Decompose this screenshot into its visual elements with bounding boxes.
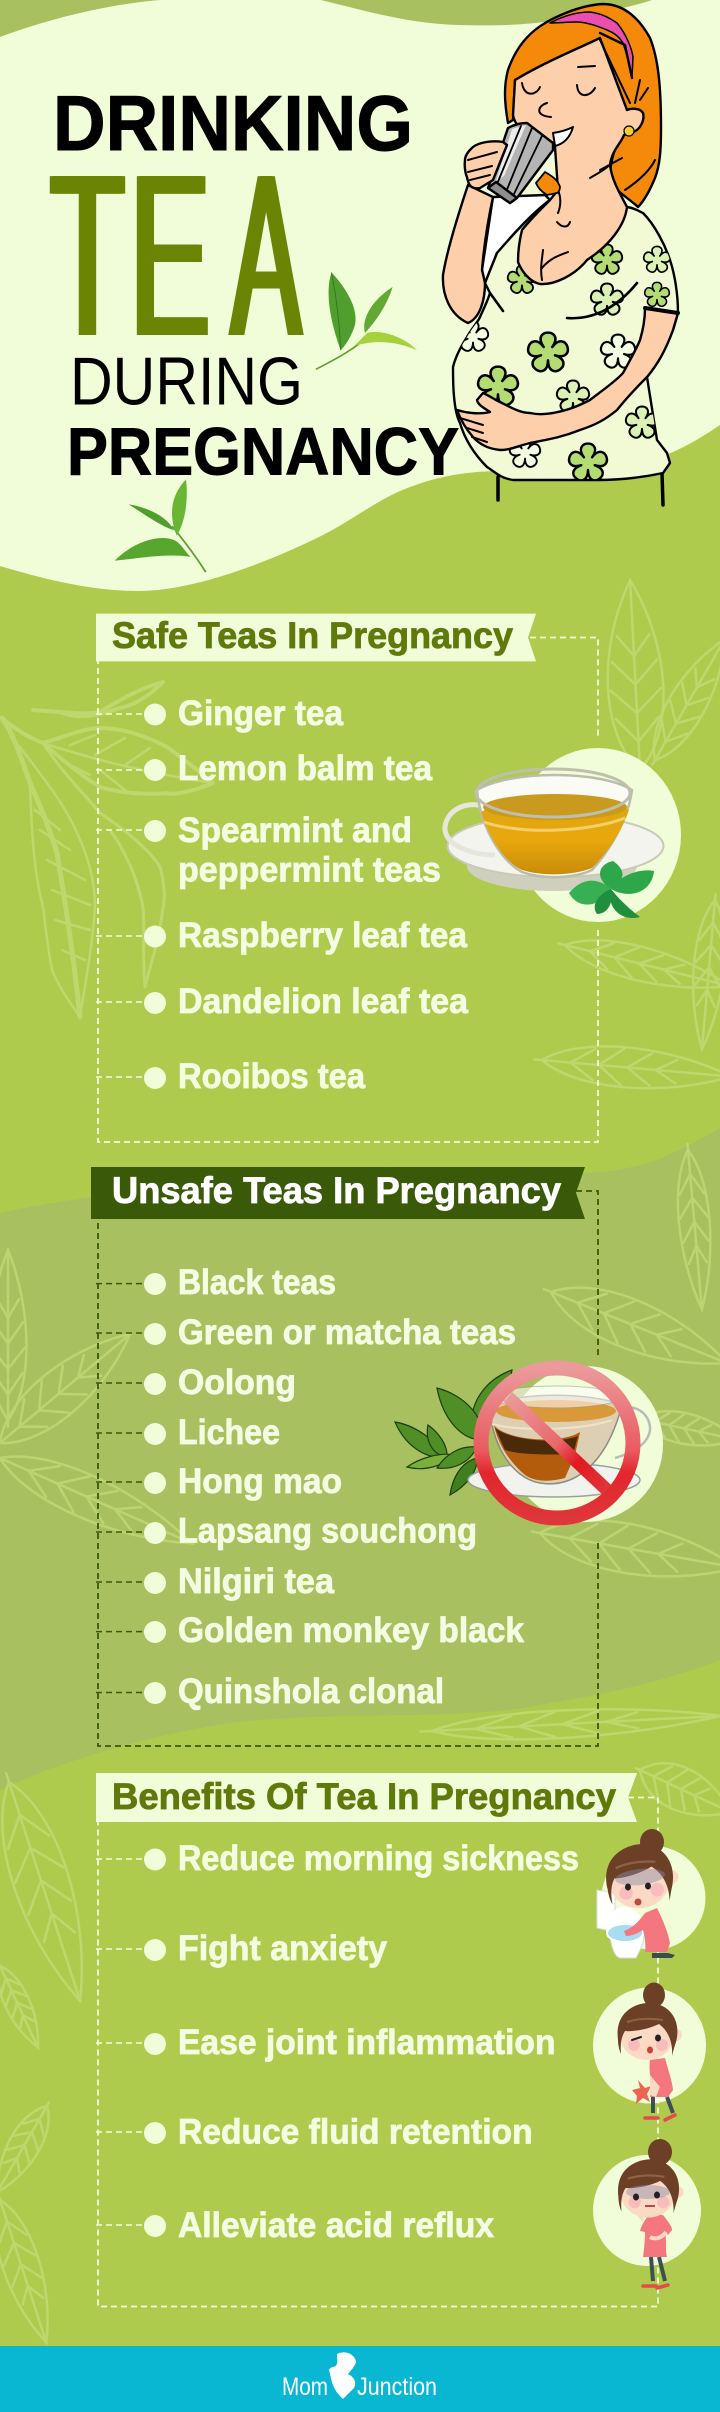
heading: safe teas ribbon: Safe Teas In Pregnancy (112, 615, 513, 656)
list item: Nilgiri tea: Nilgiri tea (178, 1562, 335, 1601)
dashed frame (98, 1191, 598, 1746)
earring (624, 126, 634, 136)
panel: benefits of tea (96, 1773, 706, 2306)
list item: Rooibos tea: Rooibos tea (178, 1057, 365, 1096)
list item: Lapsang souchong: Lapsang souchong (178, 1512, 477, 1551)
list item: Lichee: Lichee (178, 1413, 280, 1452)
list item: Black teas: Black teas (178, 1263, 336, 1302)
list item: Reduce fluid retention: Reduce fluid retention (178, 2112, 533, 2152)
title (50, 79, 459, 490)
title line: DURING: DURING (70, 344, 303, 420)
logo mark (329, 2352, 356, 2399)
mint sprig (569, 861, 654, 918)
icon: woman with joint pain (593, 1982, 706, 2120)
list item: Spearmint and peppermint teas (96, 811, 441, 890)
tea leaves (395, 1370, 512, 1495)
title line: TEA: E (130, 126, 210, 384)
list item: Raspberry leaf tea: Raspberry leaf tea (178, 916, 468, 955)
logo: MomJunction: Mom (282, 2373, 328, 2401)
legs (498, 473, 663, 505)
background leaf pattern (0, 579, 720, 2348)
footer bar (0, 2346, 720, 2412)
list item: Lichee (96, 1413, 280, 1452)
list item: Golden monkey black: Golden monkey black (178, 1611, 525, 1650)
title: A (231, 126, 301, 384)
list item: Lemon balm tea: Lemon balm tea (178, 749, 433, 788)
forearm and hand on belly (457, 308, 678, 450)
icon: woman with morning sickness at toilet (597, 1829, 706, 1958)
list item: Spearmint and peppermint teas: Spearmint and (178, 811, 412, 850)
title line: TEA (50, 126, 301, 384)
cup (488, 123, 553, 203)
list item: Rooibos tea (96, 1057, 365, 1096)
list item: Oolong (96, 1363, 296, 1402)
icon: tea leaf sprig below title (115, 480, 206, 572)
title line: PREGNANCY: PREGNANCY (67, 414, 459, 490)
list item: Ginger tea: Ginger tea (178, 694, 344, 733)
list item: Quinshola clonal: Quinshola clonal (178, 1672, 444, 1711)
icon: tea leaf sprig near title (316, 272, 417, 369)
illustration: tea leaves sprigs (115, 272, 417, 572)
logo: MomJunction: Junction (357, 2373, 437, 2401)
raised arm (443, 185, 493, 323)
list item: Reduce morning sickness: Reduce morning sickness (178, 1839, 579, 1878)
panel: safe teas (96, 614, 681, 1142)
dashed frame (98, 638, 598, 1142)
dress (453, 200, 678, 480)
list item: Ease joint inflammation: Ease joint inflammation (178, 2023, 556, 2062)
title line: TEA: T (50, 126, 125, 384)
face, neck and chest (513, 38, 643, 284)
headband (550, 12, 633, 78)
logo: MomJunction (282, 2352, 437, 2401)
hair (505, 4, 661, 207)
list item: Fight anxiety: Fight anxiety (178, 1929, 388, 1968)
prohibition ring (481, 1368, 633, 1518)
flowers on dress (458, 244, 670, 480)
facial features (522, 66, 595, 280)
list item: Ginger tea (96, 694, 344, 733)
list item: Hong mao (96, 1462, 342, 1501)
illustration: pregnant woman drinking tea (443, 4, 678, 505)
icon: prohibited black tea cup with leaves (395, 1366, 663, 1522)
list item: Nilgiri tea (96, 1562, 335, 1601)
list item: Green or matcha teas: Green or matcha teas (178, 1313, 516, 1352)
icon: cup of herbal tea with mint (445, 748, 681, 922)
dashed frame (98, 1798, 658, 2306)
holding hand (465, 141, 507, 188)
heading: unsafe teas ribbon: Unsafe Teas In Pregnancy (112, 1170, 561, 1211)
dress folds (490, 283, 637, 318)
hair strands (590, 40, 655, 190)
list item: Alleviate acid reflux: Alleviate acid reflux (178, 2206, 495, 2245)
list item: Dandelion leaf tea: Dandelion leaf tea (178, 982, 469, 1021)
white undershirt (482, 195, 550, 283)
list item: Oolong: Oolong (178, 1363, 296, 1402)
icon: woman with acid reflux (593, 2139, 701, 2288)
list item: Black teas (96, 1263, 336, 1302)
list item: Spearmint and peppermint teas: peppermint teas (178, 850, 441, 890)
panel: unsafe teas (91, 1167, 663, 1746)
heading: benefits ribbon: Benefits Of Tea In Pregnancy (112, 1776, 616, 1817)
hair lock (536, 172, 560, 195)
title line: DRINKING: DRINKING (53, 79, 413, 167)
list item: Hong mao: Hong mao (178, 1462, 342, 1501)
branch behind safe teas (2, 682, 213, 1017)
